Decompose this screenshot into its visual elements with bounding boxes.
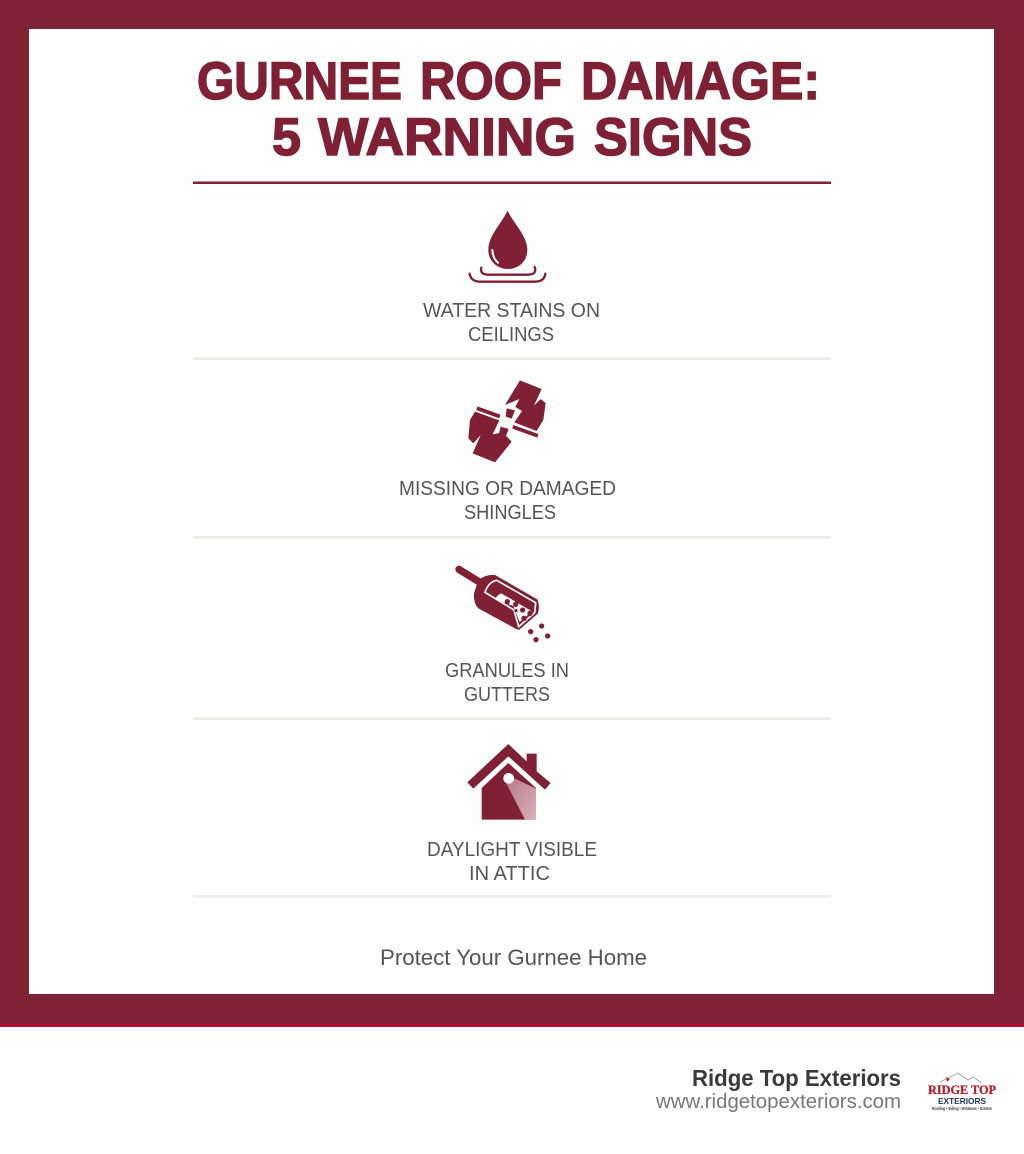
logo: RIDGE TOP [928, 1083, 996, 1097]
title rule [193, 182, 831, 184]
footer company text: Ridge Top Exteriors [692, 1065, 901, 1091]
title: GURNEE [197, 52, 402, 111]
label: granules: GRANULES IN [445, 660, 569, 682]
title: 5 [272, 108, 301, 167]
label: water stains [423, 300, 600, 346]
logo: Roofing • Siding • Windows • Gutters [932, 1106, 992, 1111]
title: SIGNS [594, 108, 752, 167]
icon: house with daylight [467, 744, 551, 820]
icon: scoop with granules [459, 569, 550, 642]
title: ROOF [420, 52, 562, 111]
label: daylight: DAYLIGHT VISIBLE [427, 839, 597, 861]
label: daylight [427, 839, 597, 885]
title: WARNING [318, 108, 576, 167]
label: daylight: IN ATTIC [469, 863, 550, 885]
label: shingles: SHINGLES [464, 502, 556, 524]
icon: water drop [470, 211, 545, 282]
label: shingles [399, 478, 616, 524]
footer company text [655, 1065, 901, 1113]
label: water stains: WATER STAINS ON [423, 300, 600, 322]
closing line: Protect Your Gurnee Home [380, 945, 647, 970]
label: shingles: MISSING OR DAMAGED [399, 478, 616, 500]
logo: EXTERIORS [938, 1096, 986, 1106]
logo [928, 1073, 996, 1111]
label: water stains: CEILINGS [468, 324, 554, 346]
footer company text: www.ridgetopexteriors.com [655, 1091, 901, 1113]
title: DAMAGE: [581, 52, 820, 111]
label: granules [445, 660, 569, 706]
label: granules: GUTTERS [464, 684, 550, 706]
title [197, 52, 820, 167]
icon: damaged shingles [468, 380, 546, 462]
